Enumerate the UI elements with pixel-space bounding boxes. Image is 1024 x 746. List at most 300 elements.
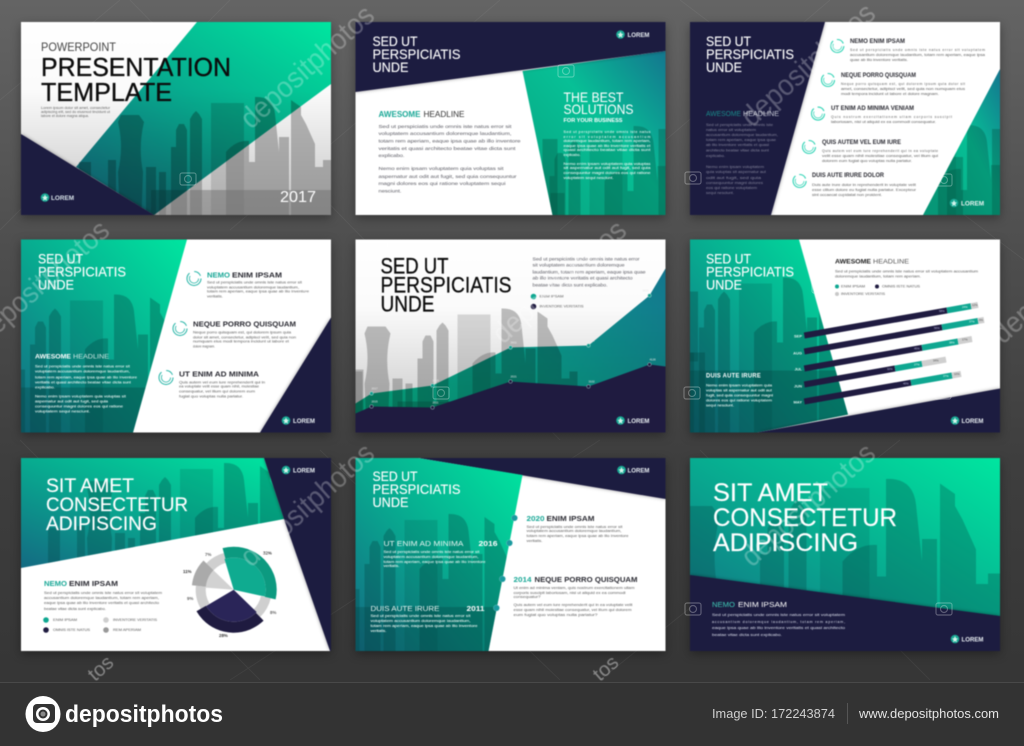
- body text: totam rem aperiam, eaque ipsa quae ab illo inventore: [35, 376, 137, 380]
- slide 3: five item list: [686, 21, 1004, 221]
- bar percentages: 27%: [914, 362, 920, 366]
- camera watermark icons: [179, 65, 952, 615]
- headline: [44, 579, 118, 588]
- timeline item 2020: 2020: [526, 514, 544, 523]
- logo: [617, 466, 650, 474]
- headline: AWESOME: [35, 354, 71, 360]
- cover text block: [41, 106, 111, 118]
- title: cover: [41, 42, 231, 107]
- item: neque porro quisquam: amet, consectetur, adipisci velit, sed quia non numquam eius: [841, 87, 965, 91]
- title: PERSPICIATIS: [706, 264, 794, 280]
- item: neque porro quisquam: numquam eius modi tempora incidunt ut labore et: [193, 340, 289, 344]
- timeline item 2014: Quis autem vel eum iure reprehenderit qui in ea voluptate velit: [514, 603, 632, 607]
- duis aute irure block: Nemo enim ipsam voluptatem quia: [706, 384, 773, 388]
- body text: explicabo.: [378, 153, 404, 158]
- logo: LOREM: [628, 33, 650, 39]
- item: ut enim ad minima: consequatur, vel illum qui dolorem eum: [179, 390, 255, 394]
- body text: totam rem aperiam, eaque ipsa quae: [706, 138, 776, 142]
- body text: eos qui ratione voluptatem: [706, 186, 757, 190]
- legend: [43, 617, 157, 633]
- bar percentages: 38%: [949, 340, 955, 344]
- item: nemo enim ipsam: Sed ut perspiciatis unde omnis iste natus error sit: [207, 280, 302, 284]
- solutions text: Sed ut perspiciatis unde omnis iste natus: [564, 130, 651, 134]
- area chart: [356, 268, 666, 432]
- headline: [378, 110, 465, 118]
- headline: [35, 354, 109, 360]
- legend: INVENTORE VERITATIS: [113, 618, 157, 622]
- logo: LOREM: [962, 638, 984, 644]
- timeline item 2016: voluptatem accusantium doloremque laudantium,: [384, 555, 478, 559]
- body text: doloremque laudantium, totam rem aperiam.: [835, 274, 921, 278]
- item: nemo enim ipsam: ENIM IPSAM: [232, 270, 282, 280]
- area chart: 3102: [588, 380, 595, 384]
- item: neque porro quisquam: dolor sit amet, consectetur, adipisci velit, sed quia non: [193, 336, 296, 340]
- solutions text: voluptatem sequi nesciunt.: [564, 176, 614, 180]
- pie labels: 8%: [270, 610, 276, 615]
- legend: ENIM IPSAM: [841, 284, 865, 288]
- logo: [282, 416, 315, 425]
- bar percentages: 37%: [969, 320, 975, 324]
- title: PERSPICIATIS: [372, 47, 460, 62]
- headline: [835, 258, 909, 266]
- timeline item 2020: ENIM IPSAM: [546, 514, 594, 523]
- body text: odit aut fugit, sed quia: [706, 176, 762, 180]
- bar percentages: 34%: [933, 358, 939, 362]
- watermarks: depositphotos: [486, 214, 633, 350]
- timeline dots: [493, 515, 518, 611]
- headline: NEMO: [44, 579, 67, 588]
- body text: Sed ut perspiciatis unde omnis iste natus error sit voluptatem: [712, 613, 845, 617]
- pie chart: [181, 537, 287, 643]
- slide 5: area chart: [353, 238, 668, 438]
- title: ADIPISCING: [46, 513, 157, 535]
- title: [372, 469, 460, 510]
- headline: HEADLINE: [873, 258, 909, 266]
- solutions text: sit aspernatur aut odit aut fugit, sed quia: [564, 166, 652, 170]
- legend: ENIM IPSAM: [540, 294, 564, 298]
- timeline item 2014: corporis suscipit laboriosam, nisi ut aliquid ex ea commodi: [514, 591, 626, 595]
- pie labels: 7%: [205, 552, 211, 557]
- bar percentages: 12%: [972, 303, 978, 307]
- solutions text: eaque ipsa quae ab illo inventore veritatis et: [564, 144, 650, 148]
- item: neque porro quisquam: [822, 73, 965, 96]
- logo: [616, 30, 650, 39]
- title: [372, 34, 460, 75]
- solutions text: quasi architecto beatae vitae dicta sunt: [564, 148, 650, 152]
- headline: HEADLINE: [73, 354, 109, 360]
- area chart: 2019: [432, 378, 439, 382]
- logo: LOREM: [628, 419, 650, 425]
- legend: INVENTORE VERITATIS: [540, 304, 584, 308]
- legend: OMNIS ISTE NATUS: [882, 284, 920, 288]
- timeline item 2020: voluptatem accusantium doloremque laudantium,: [526, 529, 622, 533]
- timeline item 2020: [526, 514, 628, 543]
- timeline item 2016: Sed ut perspiciatis unde omnis iste natus error sit: [384, 550, 480, 554]
- timeline item 2014: consequatur?: [514, 595, 540, 599]
- watermarks: tos: [84, 652, 118, 686]
- timeline item 2011: 2011: [466, 606, 485, 613]
- title: PERSPICIATIS: [372, 482, 460, 497]
- body text: [835, 270, 978, 278]
- headline: ENIM IPSAM: [69, 579, 118, 588]
- logo: LOREM: [51, 196, 74, 202]
- bar percentages: 58%: [939, 309, 945, 313]
- body text: [35, 364, 137, 414]
- body text: accusantium doloremque laudantium, totam rem aperiam,: [712, 620, 845, 624]
- logo: [950, 199, 984, 208]
- body text: Sed ut perspiciatis unde omnis iste natus error sit voluptatem accusantium: [835, 270, 978, 274]
- body text: ab illo inventore veritatis et quasi: [706, 143, 769, 147]
- body text: veritatis et quasi architecto beatae vitae dicta sunt: [35, 380, 131, 384]
- body text: [44, 591, 162, 611]
- item: ut enim ad minima: UT ENIM AD MINIMA: [179, 370, 260, 378]
- item: nemo enim ipsam: quae ab illo inventore veritatis.: [850, 58, 908, 62]
- body text: eaque ipsa quae ab illo inventore veritatis et quasi architecto: [712, 626, 845, 630]
- headline: AWESOME: [378, 110, 421, 119]
- timeline item 2016: veritatis.: [384, 564, 400, 568]
- icon: camera logo: [26, 696, 60, 732]
- logo: [951, 635, 984, 644]
- bar month labels: JUN: [794, 384, 802, 388]
- slide 9: closing slide: [622, 458, 1000, 746]
- timeline item 2014: NEQUE PORRO QUISQUAM: [534, 575, 638, 584]
- title: UNDE: [372, 495, 408, 510]
- body text: aspernatur aut odit aut fugit, sed quia consequuntur: [378, 174, 517, 179]
- area chart: 4126: [650, 358, 656, 362]
- headline: HEADLINE: [424, 110, 464, 119]
- item: duis aute irure dolor: [793, 173, 917, 197]
- body text: [378, 124, 521, 194]
- logo: [41, 193, 74, 202]
- duis aute irure block: dolores eos qui ratione voluptatem: [706, 398, 772, 402]
- legend: OMNIS ISTE NATUS: [53, 628, 90, 632]
- pie labels: 32%: [263, 550, 272, 556]
- logo: [616, 416, 650, 425]
- item: ut enim ad minima veniam: Quis nostrum exercitationem ullam corporis suscipit: [831, 115, 952, 119]
- bar percentages: 45%: [914, 346, 920, 350]
- title: UNDE: [372, 60, 408, 75]
- body text: ab illo inventore veritatis et quasi architecto: [532, 276, 633, 280]
- bar percentages: 17%: [962, 338, 968, 342]
- item: nemo enim ipsam: [187, 270, 309, 298]
- body text: magni dolores eos qui ratione voluptatem sequi: [378, 181, 506, 186]
- item: ut enim ad minima veniam: laboriosam, nisi ut aliquid ex ea commodi consequatur.: [831, 120, 936, 124]
- body text: beatae vitae dicta sunt explicabo.: [44, 607, 106, 611]
- title: SED UT: [372, 34, 418, 49]
- title: [713, 479, 897, 557]
- item: quis autem vel eum iure: velit esse quam nihil molestiae consequatur, vel illum qui: [822, 154, 938, 158]
- item: nemo enim ipsam: [831, 39, 985, 62]
- slide 2: the best solutions: [352, 21, 669, 221]
- body text: [712, 613, 845, 637]
- logo: LOREM: [961, 200, 984, 208]
- solutions text: [564, 130, 652, 180]
- body text: sequi nesciunt.: [706, 191, 734, 195]
- timeline item 2011: veritatis.: [370, 629, 386, 633]
- title: UNDE: [706, 278, 742, 292]
- item: ut enim ad minima: Quis autem vel eum iure reprehenderit qui in: [179, 380, 265, 384]
- item: ut enim ad minima: fugiat quo voluptas nulla pariatur.: [179, 394, 243, 398]
- headline: NEMO: [712, 600, 735, 609]
- title: ADIPISCING: [713, 529, 858, 557]
- body text: voluptatem accusantium doloremque laudantium,: [378, 131, 512, 136]
- title: UNDE: [38, 278, 74, 292]
- solutions heading: THE BEST: [564, 89, 624, 105]
- body text: [706, 123, 778, 195]
- area chart: 3602: [510, 340, 517, 344]
- item: quis autem vel eum iure: [802, 140, 938, 163]
- pie labels: 11%: [183, 569, 192, 574]
- body text: natus error sit voluptatem: [706, 128, 756, 132]
- body text: beatae vitae dicta sunt explicabo.: [532, 282, 608, 288]
- timeline item 2014: eum fugiat quo voluptas nulla pariatur?: [514, 613, 598, 617]
- body text: Sed ut perspiciatis unde omnis iste natus error sit: [378, 124, 513, 129]
- cover text block: adipiscing elit, sed do eiusmod tincidunt ut: [41, 110, 110, 114]
- title: cover: PRESENTATION: [41, 52, 231, 82]
- body text: consequuntur magni dolores: [706, 181, 763, 185]
- title: PERSPICIATIS: [380, 272, 512, 298]
- headline: AWESOME: [706, 109, 741, 118]
- headline: [712, 600, 787, 609]
- duis aute irure block: DUIS AUTE IRURE: [706, 372, 761, 380]
- item: quis autem vel eum iure: Quis autem vel eum iure reprehenderit qui in ea voluptate: [822, 149, 938, 153]
- body text: explicabo.: [35, 386, 55, 390]
- slide 8: timeline: [272, 458, 666, 700]
- headline: ENIM IPSAM: [738, 600, 787, 609]
- watermarks: depositphotos: [735, 437, 882, 573]
- item: duis aute irure dolor: DUIS AUTE IRURE DOLOR: [812, 173, 885, 179]
- title: SED UT: [38, 252, 83, 266]
- solutions heading: SOLUTIONS: [564, 101, 634, 117]
- bar percentages: 40%: [903, 382, 909, 386]
- solutions text: error sit voluptatem accusantium: [564, 135, 650, 139]
- title: SIT AMET: [46, 475, 134, 497]
- website: www.depositphotos.com: [858, 706, 999, 721]
- title: UNDE: [706, 60, 742, 75]
- body text: Sed ut perspiciatis unde omnis iste natus error sit voluptatem: [44, 591, 162, 595]
- solutions heading: FOR YOUR BUSINESS: [564, 118, 623, 124]
- bar month labels: SEP: [794, 334, 802, 338]
- item: duis aute irure dolor: Duis aute irure dolor in reprehenderit in voluptate velit: [812, 183, 916, 187]
- body text: Nemo enim ipsam voluptatem: [706, 165, 764, 169]
- body text: Sed ut perspiciatis unde omnis iste natus error sit: [35, 364, 130, 368]
- body text: consequuntur magni dolores eos qui ratione: [35, 404, 123, 408]
- title: CONSECTETUR: [46, 494, 188, 516]
- legend: [531, 294, 584, 309]
- body text: Nemo enim ipsam voluptatem quia voluptas sit: [378, 166, 505, 171]
- solutions text: explicabo.: [564, 153, 580, 157]
- slide 4: three item list: [18, 238, 334, 437]
- slide 7: pie chart: [21, 458, 331, 651]
- logo: LOREM: [628, 468, 650, 474]
- year: 2017: [280, 189, 316, 206]
- item: neque porro quisquam: NEQUE PORRO QUISQUAM: [193, 320, 296, 328]
- body text: Nemo enim ipsam voluptatem quia voluptas sit: [35, 394, 126, 398]
- timeline item 2014: 2014: [514, 575, 532, 584]
- body text: sit voluptatem accusantium doloremque: [532, 262, 625, 268]
- timeline item 2011: voluptatem accusantium doloremque laudantium,: [370, 619, 470, 623]
- item: ut enim ad minima veniam: UT ENIM AD MINIMA VENIAM: [831, 106, 914, 112]
- timeline item 2011: DUIS AUTE IRURE: [370, 606, 440, 613]
- bar percentages: 32%: [887, 367, 893, 371]
- headline: [706, 110, 780, 117]
- bar percentages: 24%: [962, 305, 968, 309]
- title: [706, 34, 794, 75]
- bar percentages: 56%: [934, 326, 940, 330]
- slide 6: bar chart: [688, 238, 1002, 437]
- timeline item 2016: UT ENIM AD MINIMA: [384, 541, 464, 548]
- logo: LOREM: [293, 468, 315, 474]
- bar percentages: 10%: [954, 372, 960, 376]
- title: SED UT: [372, 469, 418, 484]
- body text: beatae vitae dicta sunt explicabo.: [712, 633, 782, 637]
- item: ut enim ad minima: ea voluptate velit esse quam nihil, molestiae: [179, 384, 259, 388]
- item: nemo enim ipsam: accusantium doloremque laudantium, totam rem aperiam, eaque ipsa: [850, 53, 985, 57]
- body text: Sed ut perspiciatis unde omnis iste: [706, 123, 773, 127]
- body text: veritatis et quasi architecto beatae vitae dicta sunt: [378, 146, 517, 151]
- title: [380, 257, 512, 312]
- body text: voluptatem accusantium doloremque laudantium,: [35, 370, 130, 374]
- item: nemo enim ipsam: NEMO ENIM IPSAM: [850, 39, 905, 45]
- logo: [282, 466, 315, 474]
- timeline item 2020: veritatis.: [526, 539, 542, 543]
- pie labels: 28%: [219, 633, 228, 638]
- item: neque porro quisquam: NEQUE PORRO QUISQUAM: [841, 73, 916, 79]
- body text: nesciunt.: [378, 188, 402, 194]
- image id: Image ID: 172243874: [712, 706, 835, 721]
- legend: INVENTORE VERITATIS: [841, 292, 885, 296]
- duis aute irure block: fugit, sed quia consequuntur magni: [706, 394, 773, 398]
- watermarks: depositphotos: [234, 437, 381, 573]
- timeline item 2020: Sed ut perspiciatis unde omnis iste natus error sit: [526, 525, 622, 529]
- solutions heading: [564, 89, 634, 124]
- title: UNDE: [380, 292, 434, 316]
- bar month labels: JUL: [794, 366, 803, 372]
- title: SED UT: [706, 252, 751, 266]
- bar percentages: [887, 303, 984, 386]
- body text: laudantium, totam rem aperiam, eaque ipsa quae: [532, 270, 646, 274]
- title: SED UT: [380, 254, 448, 278]
- bar percentages: 37%: [943, 374, 949, 378]
- logo: [951, 416, 984, 425]
- item: neque porro quisquam: Neque porro quisquam est, qui dolorem ipsum quia dolor sit: [841, 82, 965, 86]
- item: nemo enim ipsam: veritatis.: [207, 294, 223, 298]
- body text: totam rem aperiam, eaque ipsa quae ab illo inventore: [378, 138, 521, 144]
- headline: AWESOME: [835, 258, 871, 266]
- bar month labels: MAY: [793, 400, 802, 404]
- logo: LOREM: [962, 419, 984, 425]
- item: nemo enim ipsam: totam rem aperiam, eaque ipsa quae ab illo inventore: [207, 290, 309, 294]
- timeline item 2011: Sed ut perspiciatis unde omnis iste natus error sit: [370, 614, 470, 618]
- item: neque porro quisquam: Neque porro quisquam est, qui dolorem ipsum quia: [193, 330, 292, 334]
- body text: aspernatur aut odit aut fugit, sed quia: [35, 400, 109, 404]
- title: [706, 252, 794, 292]
- timeline item 2014: [514, 575, 638, 617]
- item: duis aute irure dolor: esse cillum dolore eu fugiat nulla pariatur. Excepteur: [812, 188, 917, 192]
- title: cover: POWERPOINT: [41, 42, 116, 54]
- solutions text: doloremque laudantium, totam rem aperiam,: [564, 139, 650, 143]
- pie labels: 9%: [187, 596, 193, 601]
- body text: explicabo.: [706, 154, 725, 158]
- footer bar: [0, 682, 1024, 746]
- title: [46, 475, 188, 535]
- timeline item 2020: totam rem aperiam, eaque ipsa quae ab illo inventore: [526, 534, 628, 538]
- pie labels: [183, 550, 276, 638]
- title: SIT AMET: [713, 479, 828, 507]
- body text: [532, 256, 646, 288]
- legend: [835, 284, 920, 296]
- bar month labels: AUG: [793, 350, 802, 356]
- timeline item 2011: totam rem aperiam, eaque ipsa quae ab illo inventore: [370, 624, 478, 628]
- title: cover: TEMPLATE: [41, 77, 172, 107]
- title: SED UT: [706, 34, 751, 49]
- area chart: 3621: [642, 288, 649, 292]
- item: neque porro quisquam: modi tempora incidunt ut labore et dolore magnam.: [841, 92, 939, 96]
- title: [38, 252, 126, 292]
- duis aute irure block: voluptas sit aspernatur aut odit aut: [706, 388, 772, 392]
- headline: HEADLINE: [743, 109, 779, 118]
- item: neque porro quisquam: dolore magnam.: [193, 344, 215, 348]
- solutions text: Nemo enim ipsam voluptatem quia voluptas: [564, 162, 651, 166]
- timeline item 2014: esse quam nihil molestiae consequatur, vel illum qui dolorem: [514, 608, 632, 612]
- item: nemo enim ipsam: NEMO: [207, 270, 230, 280]
- bars: [804, 305, 984, 402]
- item: ut enim ad minima veniam: [812, 106, 952, 124]
- logo: LOREM: [293, 419, 315, 425]
- item: quis autem vel eum iure: dolorem eum fugiat quo voluptas nulla pariatur.: [822, 159, 912, 163]
- legend: ENIM IPSAM: [53, 618, 77, 622]
- item: nemo enim ipsam: voluptatem accusantium doloremque laudantium,: [207, 286, 299, 290]
- item: duis aute irure dolor: sint occaecat cupidatat non proident.: [812, 193, 882, 197]
- watermarks: tos: [589, 652, 623, 686]
- item: neque porro quisquam: [173, 320, 296, 348]
- cover text block: Lorem ipsum dolor sit amet, consectetur: [41, 106, 111, 110]
- body text: eaque ipsa quae ab illo inventore veritatis et quasi architecto: [44, 601, 159, 605]
- item: quis autem vel eum iure: QUIS AUTEM VEL EUM IURE: [822, 140, 901, 146]
- duis aute irure block: sequi nesciunt.: [706, 404, 734, 408]
- body text: accusantium doloremque laudantium,: [706, 133, 778, 137]
- area chart: 2015: [372, 400, 378, 404]
- item: ut enim ad minima: [159, 370, 265, 398]
- title: CONSECTETUR: [713, 504, 897, 532]
- bar percentages: 6%: [979, 318, 984, 322]
- duis aute irure block: [706, 372, 773, 408]
- title: PERSPICIATIS: [706, 47, 794, 62]
- bar month labels: [793, 334, 803, 404]
- area chart: 2017: [372, 386, 378, 390]
- area chart: 2011: [432, 400, 439, 404]
- cover text block: labore et dolore magna aliqua.: [41, 114, 89, 118]
- title: PERSPICIATIS: [38, 264, 126, 280]
- body text: architecto beatae vitae dicta sunt: [706, 148, 769, 152]
- area chart: 2012: [588, 338, 595, 342]
- item: nemo enim ipsam: Sed ut perspiciatis unde omnis iste natus error sit voluptatem: [850, 48, 985, 52]
- timeline item 2016: [384, 541, 498, 568]
- timeline item 2016: 2016: [478, 541, 498, 548]
- timeline item 2011: [370, 606, 485, 633]
- timeline item 2016: totam rem aperiam, eaque ipsa quae ab illo inventore: [384, 560, 486, 564]
- timeline item 2014: Ut enim ad minima veniam, quis nostrum exercitationem ullam: [514, 586, 634, 590]
- body text: voluptatem sequi nesciunt.: [35, 410, 90, 414]
- body text: accusantium doloremque laudantium, totam rem aperiam,: [44, 596, 159, 600]
- body text: Sed ut perspiciatis unde omnis iste natus error: [532, 256, 640, 262]
- solutions text: consequuntur magni dolores eos qui ratione: [564, 171, 650, 175]
- slide 1: presentation template cover: [18, 21, 334, 221]
- body text: quia voluptas sit aspernatur aut: [706, 170, 766, 174]
- brand name: depositphotos: [65, 701, 223, 728]
- legend: REM APERIAM: [113, 628, 141, 632]
- area chart: 2021: [510, 374, 517, 378]
